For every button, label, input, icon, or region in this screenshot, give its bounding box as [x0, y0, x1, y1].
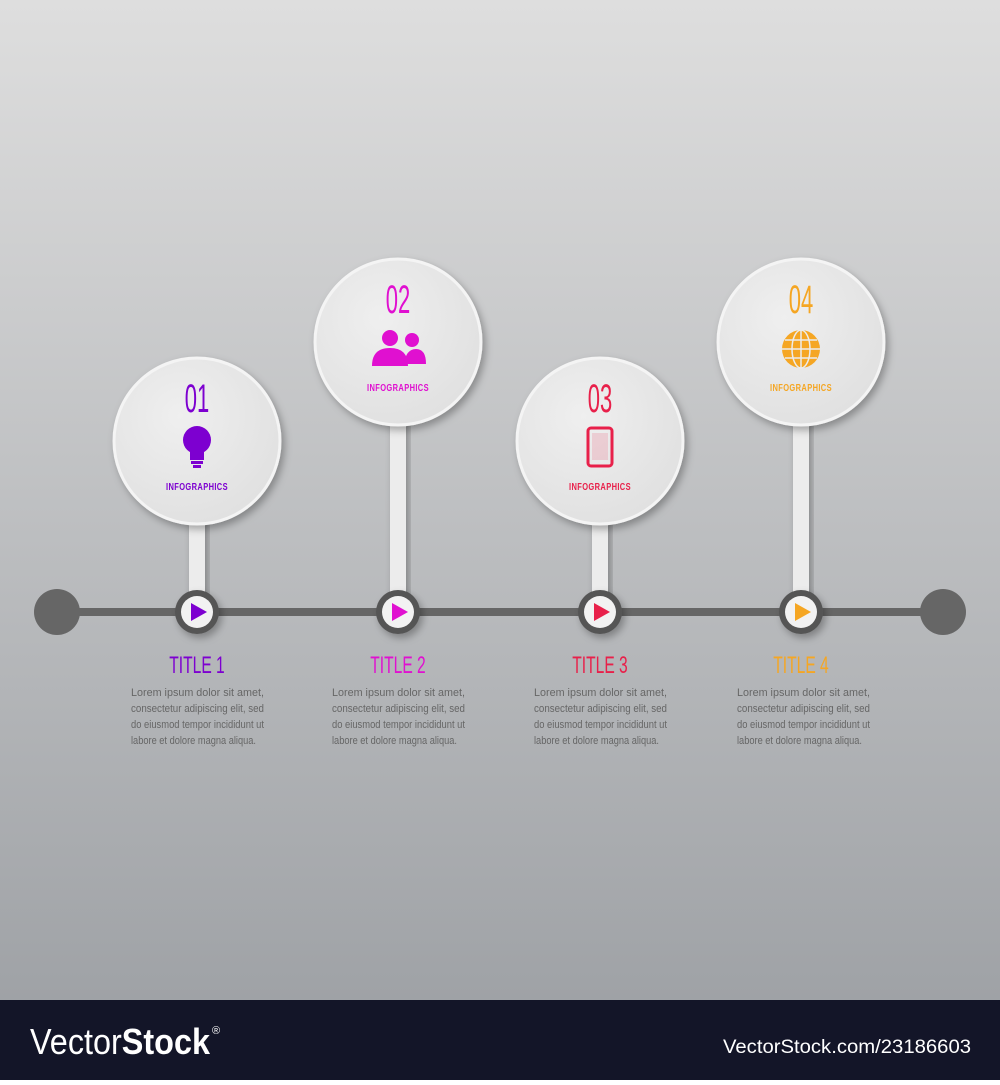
step 1: INFOGRAPHICS [166, 481, 228, 492]
step 3: TITLE 3 [572, 653, 628, 679]
footer: VectorStock.com/23186603 [723, 1037, 971, 1058]
step 3 [517, 358, 683, 747]
step 3: INFOGRAPHICS [569, 481, 631, 492]
step 1: Lorem ipsum dolor sit amet, [131, 687, 264, 699]
step 4: INFOGRAPHICS [770, 382, 832, 393]
step 4: 04 [789, 277, 813, 322]
step 2: 02 [386, 277, 410, 322]
step 4: labore et dolore magna aliqua. [737, 735, 862, 747]
step 4: do eiusmod tempor incididunt ut [737, 719, 870, 731]
step 3: 03 [588, 376, 612, 421]
step 2: Lorem ipsum dolor sit amet, [332, 687, 465, 699]
step 4: TITLE 4 [773, 653, 829, 679]
step 3: do eiusmod tempor incididunt ut [534, 719, 667, 731]
step 4 [718, 259, 884, 747]
step 1: consectetur adipiscing elit, sed [131, 703, 264, 715]
step 1: do eiusmod tempor incididunt ut [131, 719, 264, 731]
step 2: TITLE 2 [370, 653, 426, 679]
step 1 [114, 358, 280, 747]
footer [0, 1000, 1000, 1080]
step 2 [315, 259, 481, 747]
step 1: labore et dolore magna aliqua. [131, 735, 256, 747]
step 1: TITLE 1 [169, 653, 225, 679]
step 2: consectetur adipiscing elit, sed [332, 703, 465, 715]
step 2: labore et dolore magna aliqua. [332, 735, 457, 747]
step 2: INFOGRAPHICS [367, 382, 429, 393]
step 4: consectetur adipiscing elit, sed [737, 703, 870, 715]
step 3: Lorem ipsum dolor sit amet, [534, 687, 667, 699]
timeline [34, 589, 966, 635]
step 3: labore et dolore magna aliqua. [534, 735, 659, 747]
step 3: consectetur adipiscing elit, sed [534, 703, 667, 715]
footer: VectorStock [30, 1021, 211, 1062]
step 1: 01 [185, 376, 209, 421]
footer: ® [212, 1025, 220, 1037]
step 4: Lorem ipsum dolor sit amet, [737, 687, 870, 699]
step 2: do eiusmod tempor incididunt ut [332, 719, 465, 731]
